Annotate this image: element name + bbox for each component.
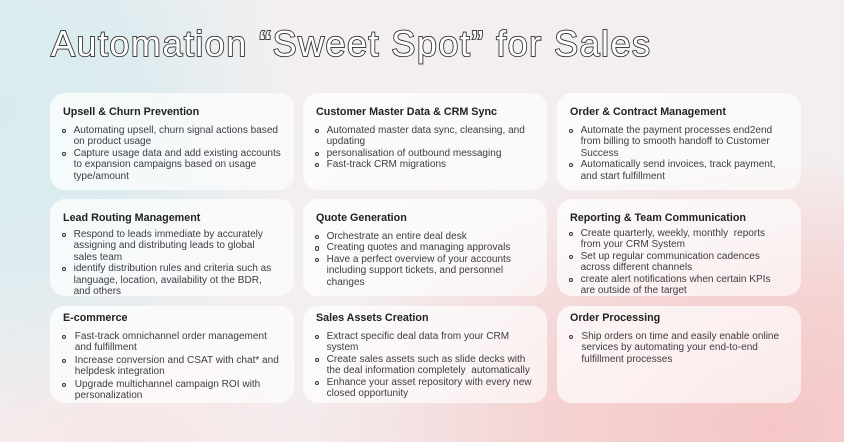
panel: Sales Assets Creation: Create sales assets such as slide decks with xyxy=(327,354,525,365)
panel: Quote Generation xyxy=(303,199,547,296)
panel: Upsell & Churn Prevention: Automating upsell, churn signal actions based xyxy=(74,125,278,136)
panel: Customer Master Data & CRM Sync: Fast-track CRM migrations xyxy=(327,159,446,170)
panel: Reporting & Team Communication: are outside of the target xyxy=(581,285,687,296)
panel: Reporting & Team Communication: Reporting & Team Communication xyxy=(570,212,746,224)
panel: Order & Contract Management: from billing to smooth handoff to Customer xyxy=(581,136,770,147)
panel: Order Processing: fulfillment processes xyxy=(581,354,672,365)
panel: Lead Routing Management: sales team xyxy=(74,252,122,263)
panel: E-commerce: E-commerce xyxy=(63,312,128,324)
panel: Order & Contract Management: and start fulfillment xyxy=(581,171,665,182)
panel: Lead Routing Management: Respond to leads immediate by accurately xyxy=(74,229,263,240)
panel: Order Processing: Ship orders on time and easily enable online xyxy=(581,331,779,342)
panel: E-commerce: personalization xyxy=(75,390,142,401)
panel: Quote Generation: Orchestrate an entire deal desk xyxy=(327,231,467,242)
panel: Reporting & Team Communication: Set up regular communication cadences xyxy=(581,251,760,262)
panel: Lead Routing Management: identify distribution rules and criteria such as xyxy=(74,263,271,274)
panel: Quote Generation: Have a perfect overview of your accounts xyxy=(327,254,511,265)
panel: Order & Contract Management: Automate the payment processes end2end xyxy=(581,125,772,136)
panel: Quote Generation: including support tickets, and personnel xyxy=(327,265,503,276)
panel: Reporting & Team Communication xyxy=(557,199,801,296)
panel: Customer Master Data & CRM Sync: Customer Master Data & CRM Sync xyxy=(316,106,497,118)
panel: Sales Assets Creation: the deal information completely automatically xyxy=(327,365,530,376)
panel: Reporting & Team Communication: across different channels xyxy=(581,262,692,273)
panel: Order & Contract Management: Success xyxy=(581,148,619,159)
panel: Sales Assets Creation: Sales Assets Creation xyxy=(316,312,429,324)
panel: Sales Assets Creation: Extract specific deal data from your CRM xyxy=(327,331,509,342)
panel: Sales Assets Creation: Enhance your asset repository with every new xyxy=(327,377,532,388)
panel: Reporting & Team Communication: from your CRM System xyxy=(581,239,685,250)
panel: Order & Contract Management xyxy=(557,93,801,190)
panel: Sales Assets Creation: system xyxy=(327,342,358,353)
panel: Sales Assets Creation xyxy=(303,306,547,403)
panel: Quote Generation: Creating quotes and managing approvals xyxy=(327,242,510,253)
panel: Lead Routing Management: Lead Routing Management xyxy=(63,212,200,224)
title: Automation “Sweet Spot” for Sales xyxy=(51,23,651,64)
panel: Quote Generation: changes xyxy=(327,277,365,288)
panel: E-commerce: Fast-track omnichannel order management xyxy=(75,331,267,342)
panel: Upsell & Churn Prevention: Upsell & Churn Prevention xyxy=(63,106,199,118)
panel: E-commerce: and fulfillment xyxy=(75,342,137,353)
panel: Upsell & Churn Prevention: on product usage xyxy=(74,136,151,147)
panel: Upsell & Churn Prevention xyxy=(50,93,294,190)
panel: Upsell & Churn Prevention: Capture usage data and add existing accounts xyxy=(74,148,281,159)
panel: Lead Routing Management: assigning and distributing leads to global xyxy=(74,240,255,251)
panel: Sales Assets Creation: closed opportunity xyxy=(327,388,408,399)
panel: Lead Routing Management: language, location, availability ot the BDR, xyxy=(74,275,262,286)
panel: E-commerce: Upgrade multichannel campaign ROI with xyxy=(75,379,260,390)
panel: Reporting & Team Communication: Create quarterly, weekly, monthly reports xyxy=(581,228,765,239)
panel: Order & Contract Management: Order & Contract Management xyxy=(570,106,726,118)
panel: E-commerce: Increase conversion and CSAT with chat* and xyxy=(75,355,279,366)
panel: Customer Master Data & CRM Sync: personalisation of outbound messaging xyxy=(327,148,501,159)
panel: Customer Master Data & CRM Sync: Automated master data sync, cleansing, and xyxy=(327,125,525,136)
panel: Upsell & Churn Prevention: type/amount xyxy=(74,171,129,182)
panel: Lead Routing Management xyxy=(50,199,294,296)
panel: Customer Master Data & CRM Sync: updating xyxy=(327,136,365,147)
panel: Order Processing xyxy=(557,306,801,403)
panel: Quote Generation: Quote Generation xyxy=(316,212,407,224)
panel: Customer Master Data & CRM Sync xyxy=(303,93,547,190)
panel: E-commerce: helpdesk integration xyxy=(75,366,165,377)
panel: Order Processing: Order Processing xyxy=(570,312,660,324)
panel: E-commerce xyxy=(50,306,294,403)
panel: Reporting & Team Communication: create alert notifications when certain KPIs xyxy=(581,274,770,285)
panel: Order & Contract Management: Automatically send invoices, track payment, xyxy=(581,159,775,170)
panel: Order Processing: services by automating your end-to-end xyxy=(581,342,758,353)
panel: Upsell & Churn Prevention: to expansion campaigns based on usage xyxy=(74,159,256,170)
